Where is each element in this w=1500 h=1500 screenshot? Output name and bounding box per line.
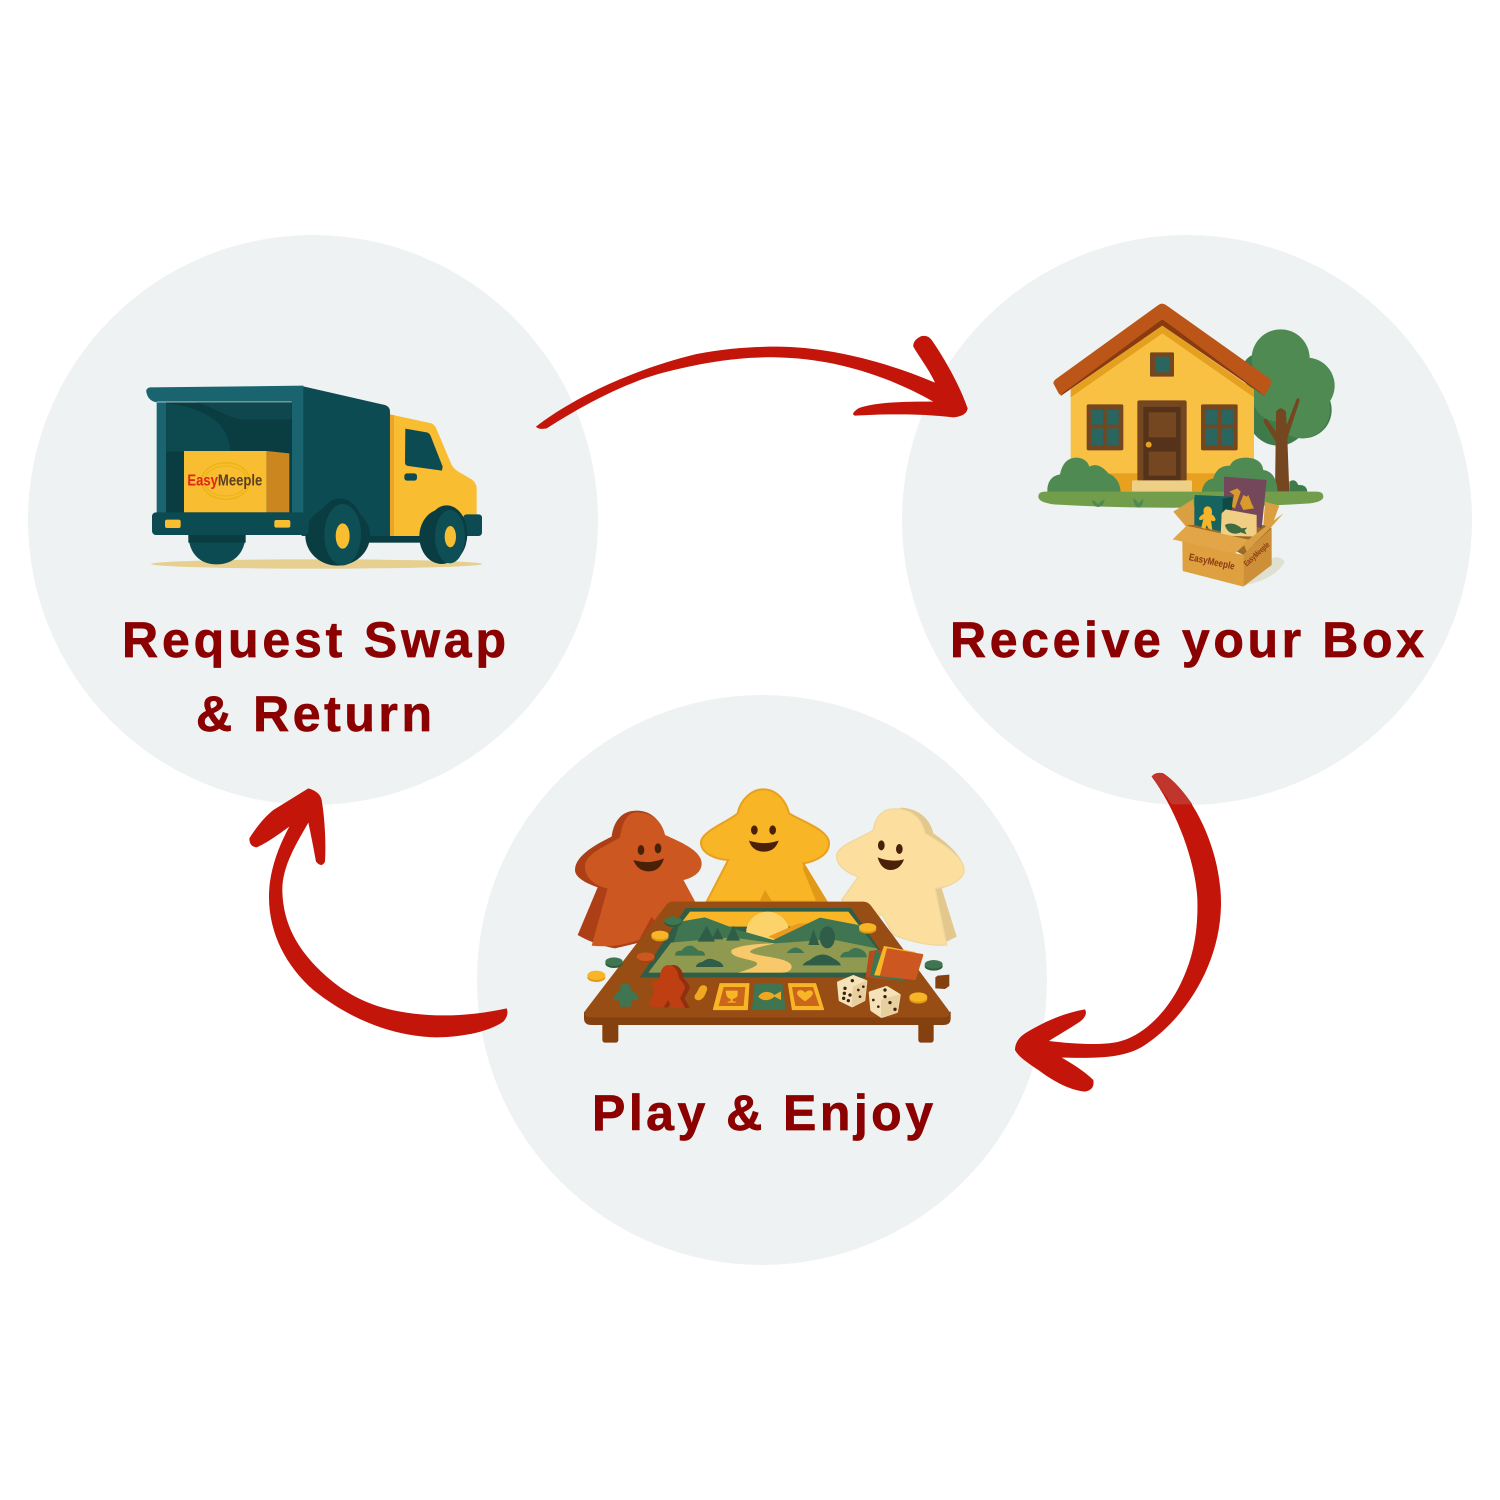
game cards	[713, 947, 922, 1010]
table	[584, 902, 951, 1043]
box label: EasyMeeple	[1188, 552, 1236, 573]
yellow meeple	[701, 789, 829, 903]
arrow: receive box to play and enjoy	[1015, 773, 1221, 1092]
delivered cardboard box	[1173, 477, 1285, 587]
arrow: request swap to receive box	[536, 336, 968, 429]
red meeple	[575, 811, 702, 948]
arrow: play and enjoy to request swap	[249, 788, 507, 1037]
box logo text: EasyMeeple	[187, 473, 262, 490]
panel: play and enjoy	[477, 695, 1047, 1265]
dice	[838, 976, 899, 1017]
box side label: EasyMeeple	[1242, 540, 1272, 568]
icon: house with delivered box	[1038, 304, 1335, 587]
game tokens	[587, 916, 949, 1008]
icon: meeples around board game table	[575, 789, 964, 1043]
game board	[640, 908, 899, 977]
heading: receive your box: Receive your Box	[950, 612, 1424, 668]
panel: request swap and return	[28, 235, 598, 805]
heading: and return: & Return	[196, 686, 432, 742]
panel: receive your box	[902, 235, 1472, 805]
heading: request swap: Request Swap	[122, 612, 506, 668]
cream meeple	[837, 808, 964, 946]
icon: delivery truck	[146, 386, 482, 569]
heading: play and enjoy: Play & Enjoy	[592, 1085, 933, 1141]
